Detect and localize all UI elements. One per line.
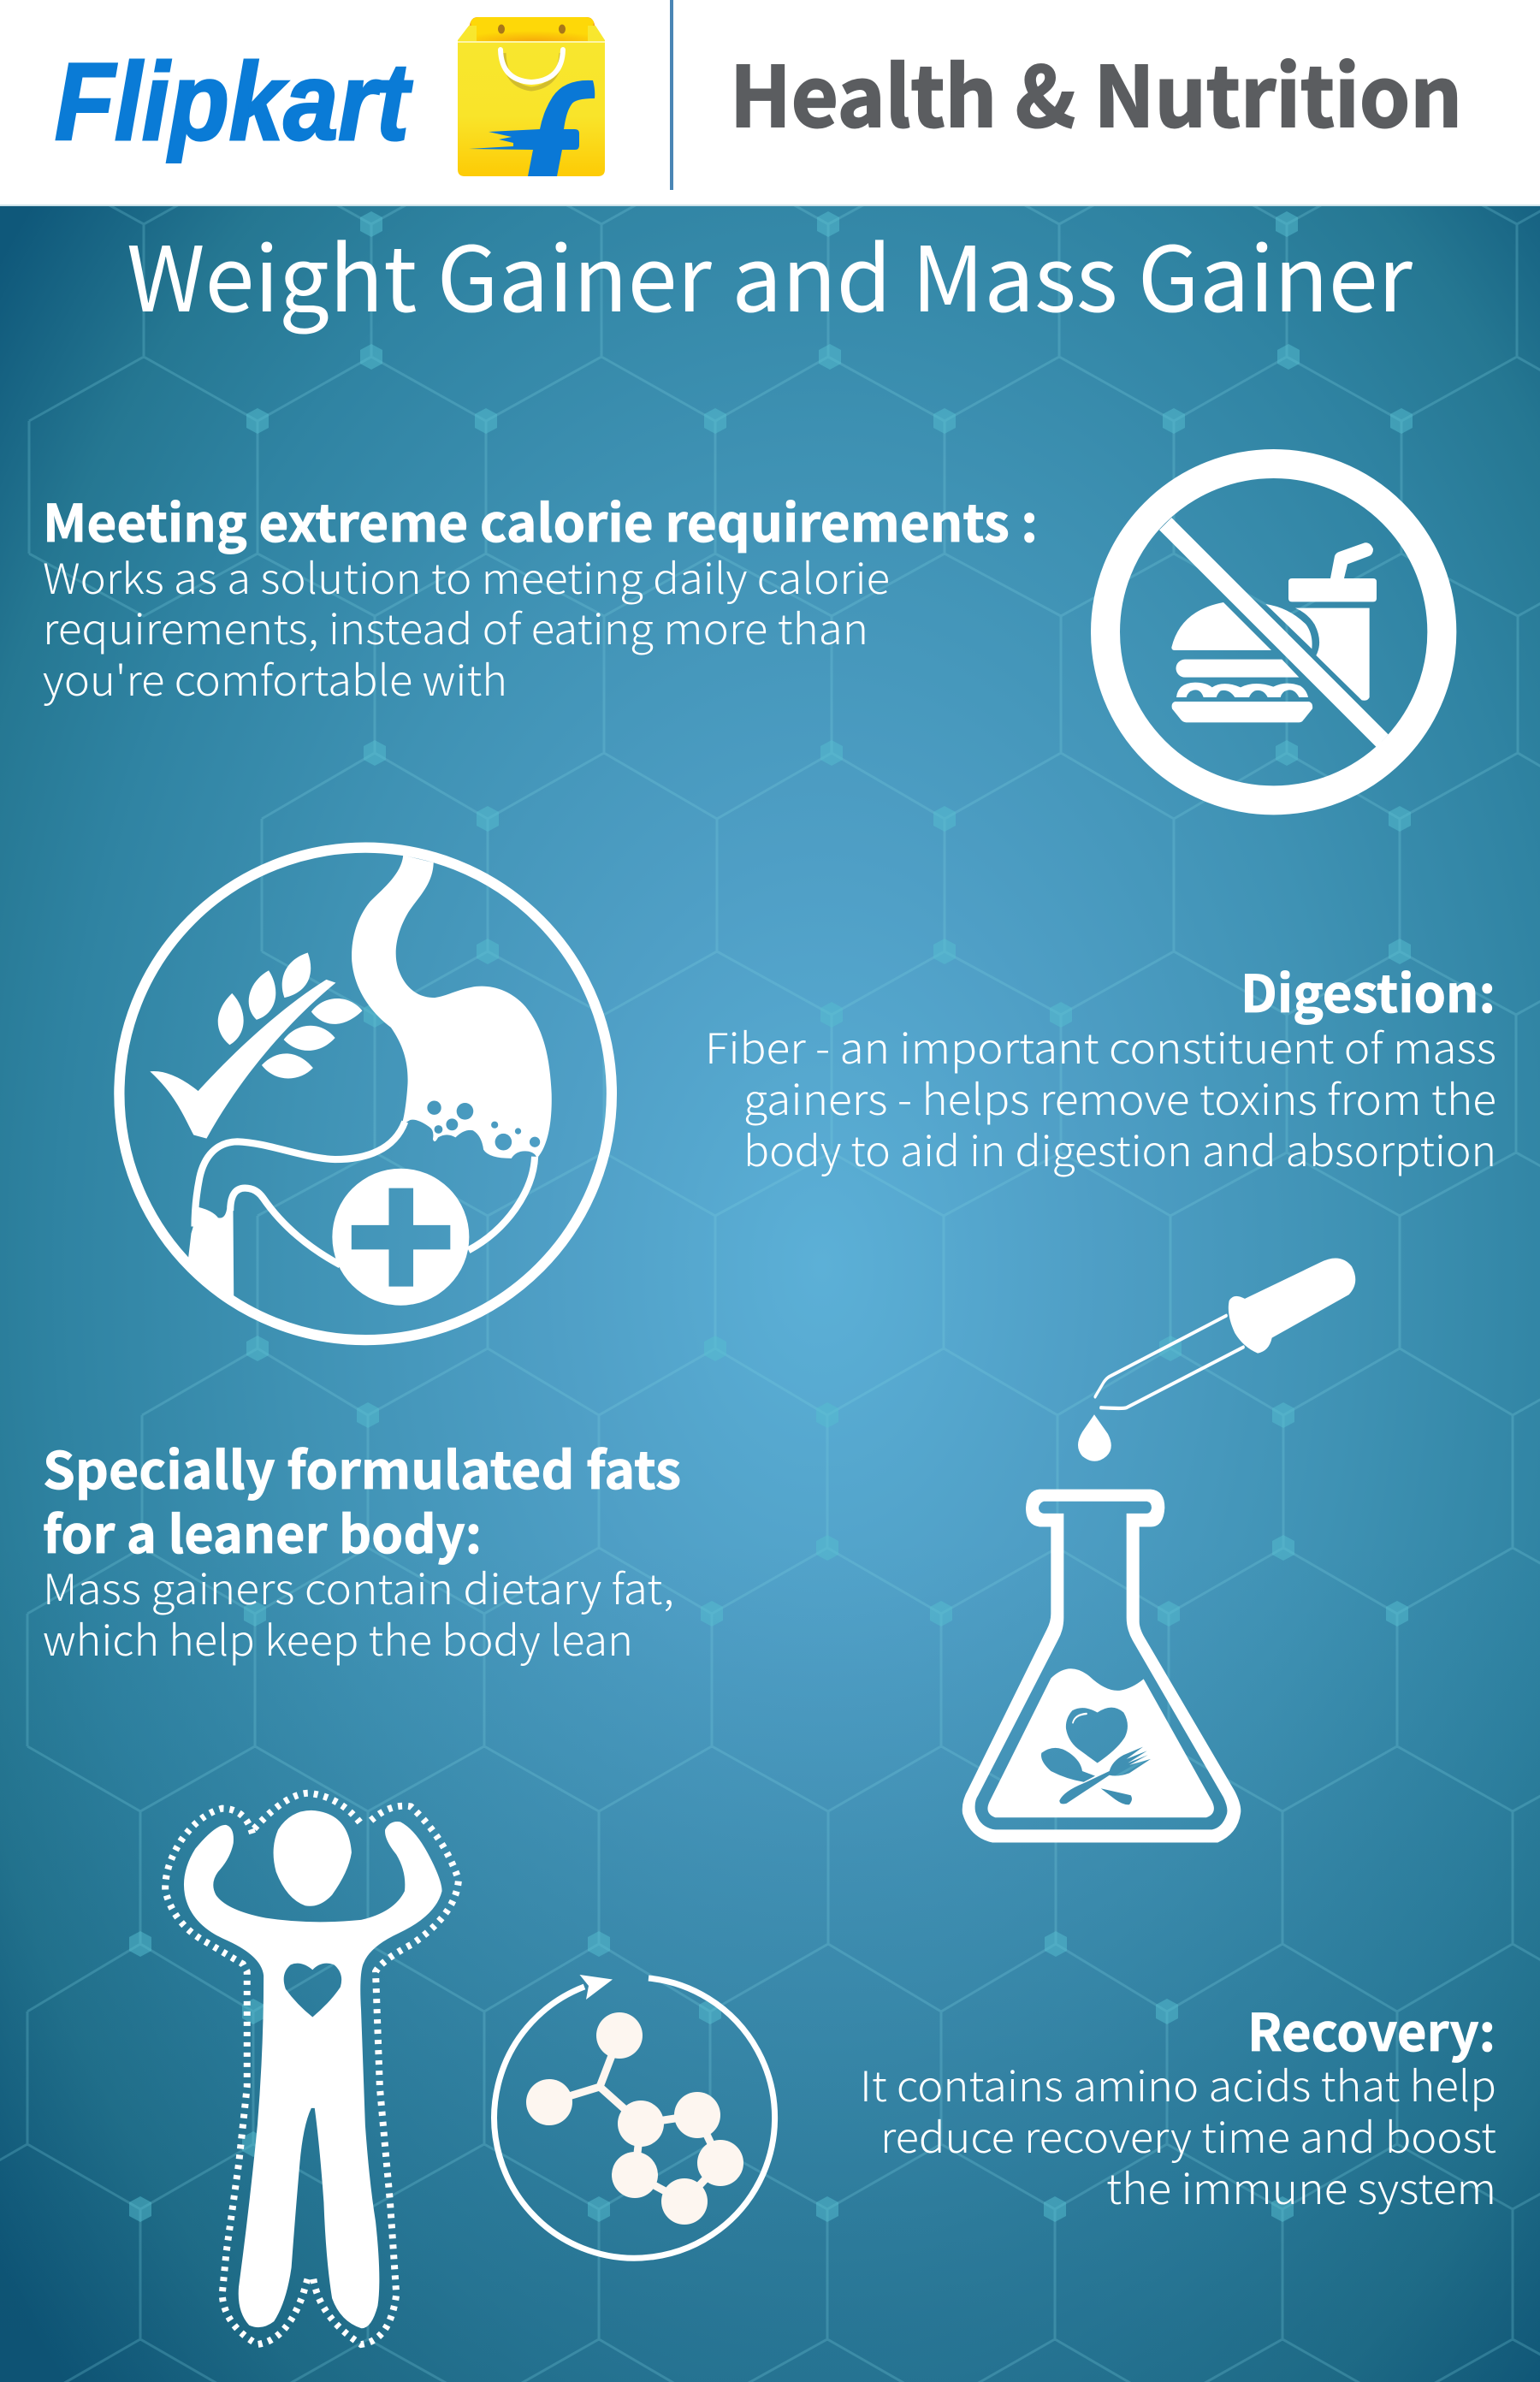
text block: digestion: body to aid in digestion and absorption (743, 1118, 1496, 1179)
main title: Weight Gainer and Mass Gainer (127, 208, 1413, 338)
text block: recovery: reduce recovery time and boost (880, 2105, 1496, 2166)
icon: digestion stomach (119, 848, 612, 1340)
text block: meeting extreme calorie requirements: Meeting extreme calorie requirements : (43, 483, 1038, 557)
medical plus badge (332, 1169, 469, 1306)
header divider (670, 0, 673, 190)
text block: digestion (705, 953, 1496, 1179)
stomach with bubbles (352, 856, 552, 1158)
intestine outline (195, 1122, 535, 1265)
text block: meeting extreme calorie requirements: you're comfortable with (43, 648, 507, 708)
flask (962, 1490, 1241, 1843)
text block: meeting extreme calorie requirements (43, 483, 1038, 708)
text block: recovery (860, 1992, 1496, 2217)
burger (1171, 602, 1312, 722)
cycle arrow (495, 1975, 775, 2258)
text block: specially formulated fats: which help keep the body lean (43, 1608, 633, 1668)
body silhouette with heart (184, 1810, 442, 2328)
flask liquid with heart, spoon and fork (987, 1668, 1214, 1817)
header band (0, 0, 1540, 206)
molecule (526, 2012, 743, 2225)
icon: no fast food (1105, 464, 1442, 800)
drink cup (1288, 542, 1377, 701)
text block: specially formulated fats: for a leaner body: (43, 1494, 482, 1568)
icon: dropper and flask (962, 1258, 1355, 1843)
text block: recovery: Recovery: (1247, 1992, 1496, 2066)
text block: specially formulated fats: Specially formulated fats (43, 1430, 681, 1504)
Flipkart wordmark: Flipkart (55, 41, 412, 163)
dropper (1095, 1258, 1355, 1408)
text block: digestion: Digestion: (1241, 953, 1496, 1028)
text block: meeting extreme calorie requirements: Works as a solution to meeting daily calorie (43, 546, 890, 607)
text block: specially formulated fats (43, 1430, 681, 1668)
text block: recovery: It contains amino acids that help (860, 2053, 1496, 2114)
icon: amino acid molecule with cycle arrow (495, 1975, 775, 2258)
text block: recovery: the immune system (1106, 2156, 1496, 2217)
dotted outline (165, 1793, 459, 2344)
intestine fill (187, 1206, 234, 1301)
header title: Health & Nutrition (730, 30, 1462, 151)
ring (119, 848, 612, 1340)
text block: specially formulated fats: Mass gainers contain dietary fat, (43, 1556, 674, 1617)
text block: digestion: Fiber - an important constituent of mass (705, 1016, 1496, 1076)
icon: lean body figure (165, 1793, 459, 2344)
text block: meeting extreme calorie requirements: requirements, instead of eating more than (43, 596, 868, 657)
no-sign ring and bar (1105, 464, 1442, 800)
check mark with leaves (150, 952, 362, 1139)
text block: digestion: gainers - helps remove toxins from the (743, 1067, 1496, 1128)
icon: shopping bag logo (458, 17, 605, 176)
drop (1078, 1414, 1111, 1461)
